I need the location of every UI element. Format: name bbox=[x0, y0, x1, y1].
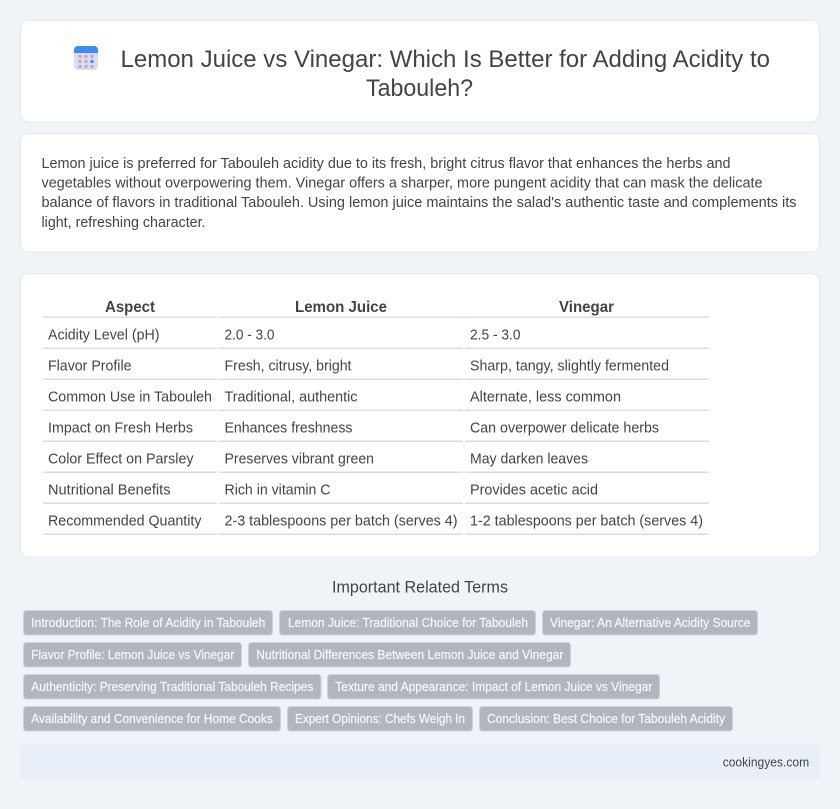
table row: color effect: Preserves vibrant green bbox=[224, 452, 374, 468]
table row: nutritional benefits bbox=[48, 482, 598, 498]
table row: acidity level bbox=[48, 328, 520, 344]
table header row: Lemon Juice bbox=[295, 299, 387, 316]
table row: recommended quantity: 1-2 tablespoons per batch (serves 4) bbox=[470, 514, 703, 530]
table row: flavor profile: Fresh, citrusy, bright bbox=[224, 358, 352, 374]
tag: expert opinions: Expert Opinions: Chefs Weigh In bbox=[295, 712, 465, 726]
tag: lemon juice bbox=[280, 610, 536, 635]
title bbox=[120, 46, 770, 102]
table row: color effect: Color Effect on Parsley bbox=[48, 452, 194, 468]
panel: header bbox=[20, 20, 820, 122]
table row: acidity level: Acidity Level (pH) bbox=[48, 328, 160, 344]
icon: calendar bbox=[74, 46, 98, 70]
text block: summary: vegetables without overpowering them. Vinegar offers a sharper, more pungent acidity that can mask the delicate bbox=[42, 175, 762, 192]
table row: flavor profile: Flavor Profile bbox=[48, 358, 132, 374]
tag: introduction bbox=[24, 610, 272, 635]
table row: acidity level: 2.0 - 3.0 bbox=[224, 328, 274, 344]
table row: nutritional benefits: Rich in vitamin C bbox=[224, 482, 330, 498]
tag: introduction: Introduction: The Role of Acidity in Tabouleh bbox=[31, 616, 265, 630]
tag: availability bbox=[24, 706, 280, 731]
title: Tabouleh? bbox=[366, 75, 473, 102]
table row: flavor profile: Sharp, tangy, slightly fermented bbox=[470, 358, 669, 374]
panel: summary paragraph bbox=[20, 134, 820, 252]
panel: comparison table bbox=[20, 274, 820, 557]
table row: impact on herbs bbox=[48, 420, 659, 436]
table row: common use: Traditional, authentic bbox=[224, 390, 358, 406]
heading: important related terms: Important Related Terms bbox=[332, 579, 508, 597]
footer: cookingyes.com bbox=[723, 755, 809, 770]
tag: vinegar bbox=[542, 610, 758, 635]
table row: flavor profile bbox=[48, 358, 669, 374]
tag: conclusion: Conclusion: Best Choice for Tabouleh Acidity bbox=[487, 712, 726, 726]
table row: impact on herbs: Enhances freshness bbox=[224, 420, 352, 436]
tag: flavor profile bbox=[24, 642, 242, 667]
table row: acidity level: 2.5 - 3.0 bbox=[470, 328, 520, 344]
table header row bbox=[105, 299, 614, 316]
table row: common use: Common Use in Tabouleh bbox=[48, 390, 212, 406]
tag: authenticity: Authenticity: Preserving Traditional Tabouleh Recipes bbox=[31, 680, 313, 694]
tag: conclusion bbox=[480, 706, 732, 731]
tag: expert opinions bbox=[288, 706, 472, 731]
tag: flavor profile: Flavor Profile: Lemon Juice vs Vinegar bbox=[31, 648, 234, 662]
footer bbox=[20, 745, 820, 779]
text block: summary: light, refreshing character. bbox=[42, 214, 206, 231]
table row: common use: Alternate, less common bbox=[470, 390, 621, 406]
table row: recommended quantity: Recommended Quantity bbox=[48, 514, 202, 530]
tag: texture and appearance bbox=[328, 674, 660, 699]
table row: nutritional benefits: Provides acetic acid bbox=[470, 482, 598, 498]
tag: nutritional differences: Nutritional Differences Between Lemon Juice and Vinegar bbox=[256, 648, 563, 662]
table row: color effect: May darken leaves bbox=[470, 452, 588, 468]
table row: color effect bbox=[48, 452, 588, 468]
tag: texture and appearance: Texture and Appearance: Impact of Lemon Juice vs Vinegar bbox=[335, 680, 652, 694]
tag: authenticity bbox=[24, 674, 321, 699]
tag: lemon juice: Lemon Juice: Traditional Choice for Tabouleh bbox=[288, 616, 528, 630]
table header row: Vinegar bbox=[559, 299, 614, 316]
table row: recommended quantity: 2-3 tablespoons per batch (serves 4) bbox=[224, 514, 458, 530]
tag group: related terms bbox=[24, 610, 758, 731]
text block: summary: Lemon juice is preferred for Tabouleh acidity due to its fresh, bright citrus flavor that enhances the herbs and bbox=[42, 155, 730, 172]
title: Lemon Juice vs Vinegar: Which Is Better for Adding Acidity to bbox=[120, 46, 770, 73]
table row: impact on herbs: Can overpower delicate herbs bbox=[470, 420, 659, 436]
table row: common use bbox=[48, 390, 621, 406]
tag: vinegar: Vinegar: An Alternative Acidity Source bbox=[550, 616, 751, 630]
table row: impact on herbs: Impact on Fresh Herbs bbox=[48, 420, 193, 436]
text block: summary: balance of flavors in traditional Tabouleh. Using lemon juice maintains the salad's authentic taste and complements its bbox=[42, 194, 796, 211]
table header row: Aspect bbox=[105, 299, 156, 316]
table row: nutritional benefits: Nutritional Benefits bbox=[48, 482, 170, 498]
tag: availability: Availability and Convenience for Home Cooks bbox=[31, 712, 273, 726]
table row: recommended quantity bbox=[48, 514, 703, 530]
text block: summary bbox=[42, 155, 796, 231]
tag: nutritional differences bbox=[248, 642, 570, 667]
